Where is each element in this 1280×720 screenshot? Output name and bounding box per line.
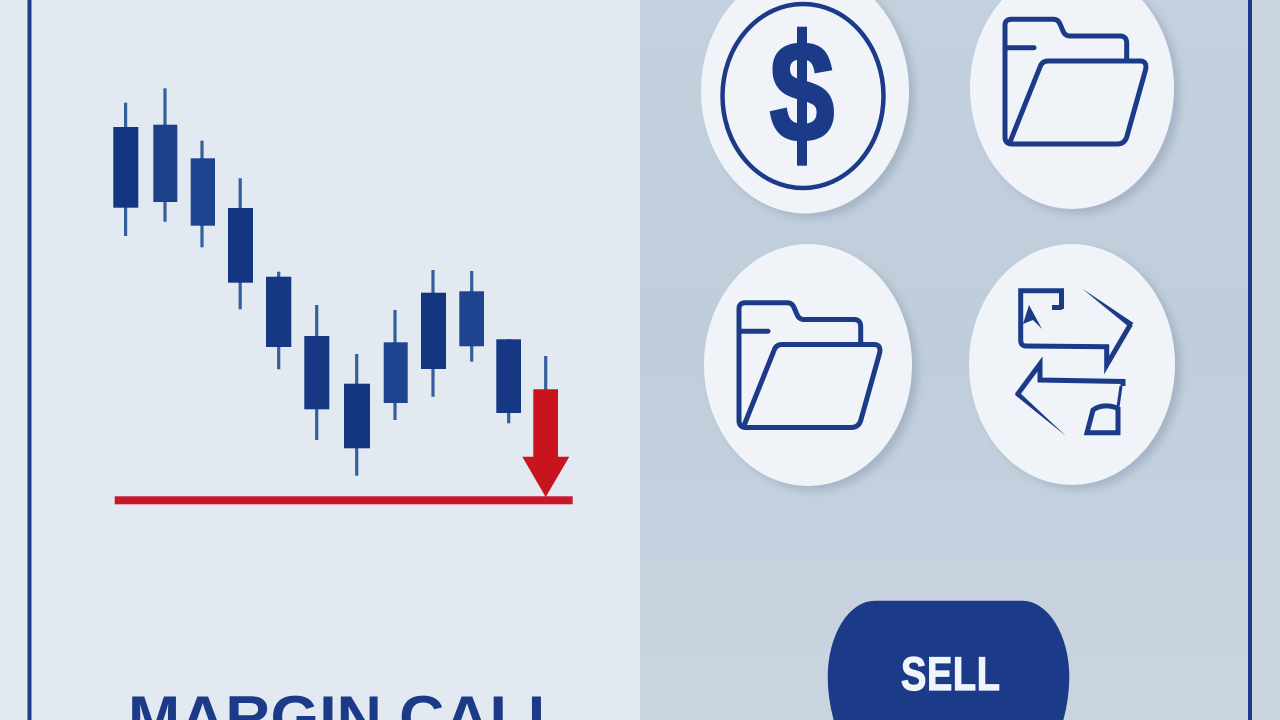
candle 2 [153,88,177,222]
sell label: SELL [901,648,1000,701]
candle 9 [421,270,446,397]
candle 4 [228,178,253,309]
margin level line [115,496,573,504]
candle 11 [496,339,521,423]
icon circle: swap arrows [969,244,1181,490]
candlestick chart [113,88,573,504]
folder icon [1005,19,1146,144]
candle 10 [459,271,484,362]
candle 5 [266,272,291,369]
candle 6 [304,305,329,440]
candle 7 [344,354,370,476]
candle 8 [384,310,408,420]
arrow left [1015,364,1123,436]
folder icon [739,303,880,428]
panel: right actions background [640,0,1280,720]
candle 1 [113,103,138,236]
panel: left chart background [0,0,640,720]
right frame line [1248,0,1252,720]
icon circle: dollar [701,0,915,218]
dollar sign: $ [770,12,834,172]
right outer strip [1252,0,1280,720]
red arrow down [522,356,569,497]
sell button [828,601,1069,720]
icon circle: folder bottom [704,244,918,491]
dollar ring [722,4,884,188]
arrow right [1021,288,1134,365]
left frame line [28,0,32,720]
candle 3 [191,141,215,247]
icon circle: folder top [970,0,1180,214]
